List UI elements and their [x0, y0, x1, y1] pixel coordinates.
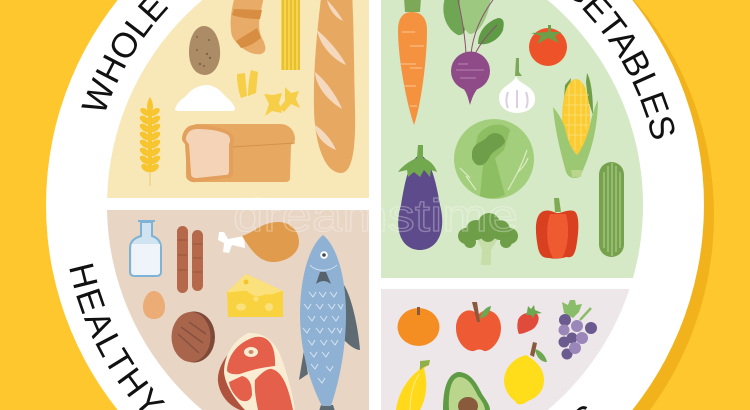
icon: milk bottle — [130, 221, 161, 276]
icon: farfalle — [264, 87, 300, 116]
icon: potato — [189, 26, 220, 75]
icon: beet with leaves — [443, 0, 504, 105]
icon: cucumber — [599, 162, 624, 257]
icon: egg — [143, 291, 165, 319]
icon: cheese — [227, 274, 283, 317]
panel: whole grains background — [107, 0, 369, 198]
icon: spaghetti — [281, 0, 300, 70]
icon: banana — [396, 360, 430, 410]
icon: flour pile — [175, 85, 235, 111]
icon: red pepper — [536, 198, 578, 259]
icon: strawberry — [517, 305, 542, 334]
icon: croissant — [231, 0, 265, 54]
icon: bread loaf — [182, 124, 295, 182]
icon: beef patty — [172, 312, 215, 362]
watermark: dreamstime — [233, 190, 518, 241]
icon: corn — [553, 73, 598, 178]
icon: chicken leg — [218, 222, 299, 262]
icon: tomato — [529, 25, 567, 66]
icon: wheat — [138, 97, 162, 186]
icon: garlic — [499, 58, 535, 113]
icon: penne — [237, 70, 258, 98]
icon: lemon — [504, 342, 547, 404]
icon: carrot — [398, 0, 427, 125]
icon: baguette — [314, 0, 355, 173]
panel: fruits background — [381, 289, 630, 410]
icon: broccoli — [458, 213, 518, 265]
icon: sausages — [177, 226, 203, 293]
icon: orange — [398, 307, 440, 346]
icon: steak — [218, 333, 295, 410]
icon: grapes — [558, 300, 597, 360]
icon: apple — [456, 302, 501, 351]
panel: healthy protein background — [107, 210, 369, 410]
icon: eggplant — [398, 145, 442, 250]
icon: fish — [299, 235, 360, 410]
panel: vegetables background — [381, 0, 643, 278]
icon: avocado — [443, 372, 490, 410]
icon: cabbage — [454, 119, 534, 199]
